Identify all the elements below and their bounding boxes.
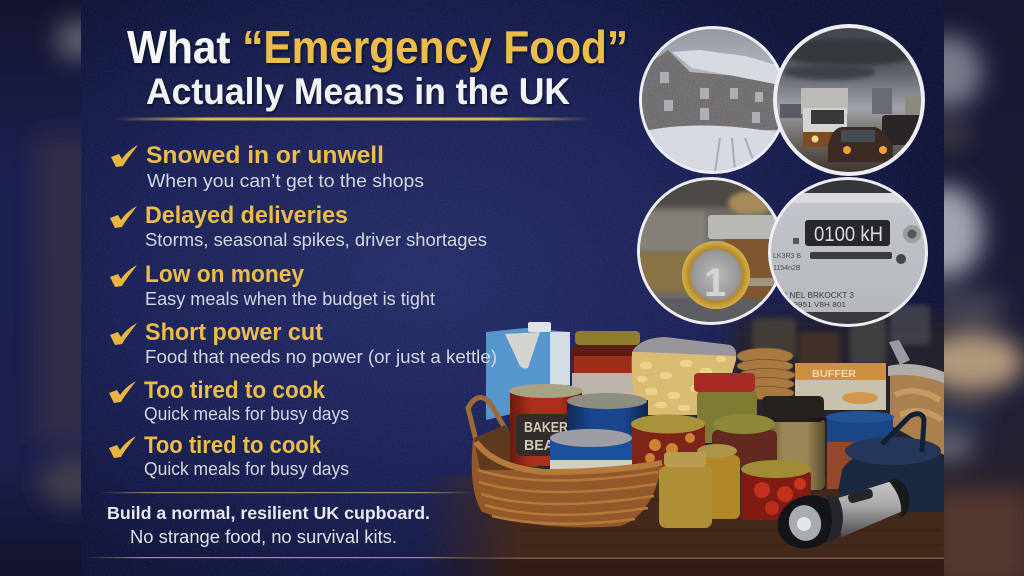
closing message bbox=[107, 503, 430, 547]
baker beans can: BAKER bbox=[524, 419, 568, 436]
item: snowed in: Snowed in or unwell bbox=[146, 142, 384, 169]
item: too tired to cook repeated: Quick meals for busy days bbox=[144, 459, 349, 479]
closing message: No strange food, no survival kits. bbox=[130, 527, 397, 547]
photo circle: smart meter: 0100 kH bbox=[814, 223, 883, 246]
blurred left side band bbox=[0, 0, 114, 576]
item: too tired to cook repeated: Too tired to cook bbox=[144, 432, 322, 459]
pasta bag bbox=[632, 337, 736, 415]
bread bag bbox=[888, 340, 944, 455]
photo circle: smart meter: ES 9951 V8H 801 bbox=[780, 302, 846, 309]
food scene bbox=[468, 322, 944, 557]
item: snowed in: When you can’t get to the shops bbox=[147, 171, 424, 191]
item: low on money bbox=[110, 261, 435, 309]
checklist bbox=[109, 142, 497, 479]
title: Actually Means in the UK bbox=[146, 71, 570, 112]
item: low on money: Easy meals when the budget is tight bbox=[145, 289, 435, 309]
title underline bbox=[113, 118, 591, 120]
blue can right bbox=[826, 411, 894, 489]
wicker basket bbox=[468, 398, 662, 527]
item: delayed deliveries bbox=[110, 202, 487, 250]
red pepper tin bbox=[741, 460, 811, 520]
peanut jar bbox=[762, 396, 825, 490]
amber preserve jar bbox=[712, 414, 777, 466]
item: snowed in bbox=[111, 142, 424, 191]
closing message: Build a normal, resilient UK cupboard. bbox=[107, 503, 430, 523]
item: too tired to cook: Quick meals for busy days bbox=[144, 404, 349, 424]
photo circle: smart meter: 1154n2B bbox=[773, 265, 801, 272]
item: low on money: Low on money bbox=[145, 261, 305, 288]
milk carton bbox=[486, 322, 570, 420]
blurred pantry shelf behind food bbox=[730, 305, 970, 468]
item: short power cut: Short power cut bbox=[145, 319, 323, 346]
item: delayed deliveries: Storms, seasonal spikes, driver shortages bbox=[145, 230, 487, 250]
item: short power cut: Food that needs no power (or just a kettle) bbox=[145, 347, 497, 367]
small jar front bbox=[659, 452, 712, 528]
item: too tired to cook bbox=[109, 377, 349, 424]
tomato sauce jar bbox=[572, 331, 640, 395]
buffer biscuit box: BUFFER bbox=[812, 369, 857, 380]
red lid jar bbox=[694, 373, 757, 443]
photo circle: snowed-in houses bbox=[639, 25, 787, 176]
baker beans can bbox=[509, 384, 583, 466]
photo circle: smart meter: LK3R3 B bbox=[773, 253, 801, 260]
item: short power cut bbox=[110, 319, 497, 367]
item: delayed deliveries: Delayed deliveries bbox=[145, 202, 348, 229]
blue tin bbox=[567, 393, 648, 442]
photo circle: smart meter bbox=[768, 177, 928, 327]
buffer biscuit box bbox=[795, 363, 886, 410]
photo circle: truck in stormy traffic bbox=[770, 24, 928, 176]
baker beans can: BEA bbox=[524, 437, 554, 454]
kettle bbox=[838, 414, 944, 512]
photo circle: euro coin stack: 1 bbox=[704, 261, 726, 305]
beans tin bbox=[631, 414, 705, 467]
photo circle: smart meter: MLNEL BRKOCKT 3 bbox=[778, 291, 855, 300]
photo circle: euro coin stack bbox=[636, 177, 786, 328]
oat biscuit stack bbox=[737, 348, 795, 400]
blurred right side band bbox=[907, 0, 1024, 576]
small jar back bbox=[696, 444, 740, 519]
torch bbox=[778, 479, 910, 549]
basket rim and weave bbox=[476, 442, 662, 524]
wooden table bbox=[420, 462, 980, 576]
item: too tired to cook: Too tired to cook bbox=[144, 377, 326, 404]
item: too tired to cook repeated bbox=[109, 432, 349, 479]
title bbox=[127, 21, 628, 112]
front blue tin bbox=[550, 429, 632, 469]
title: What “Emergency Food” bbox=[127, 21, 628, 73]
